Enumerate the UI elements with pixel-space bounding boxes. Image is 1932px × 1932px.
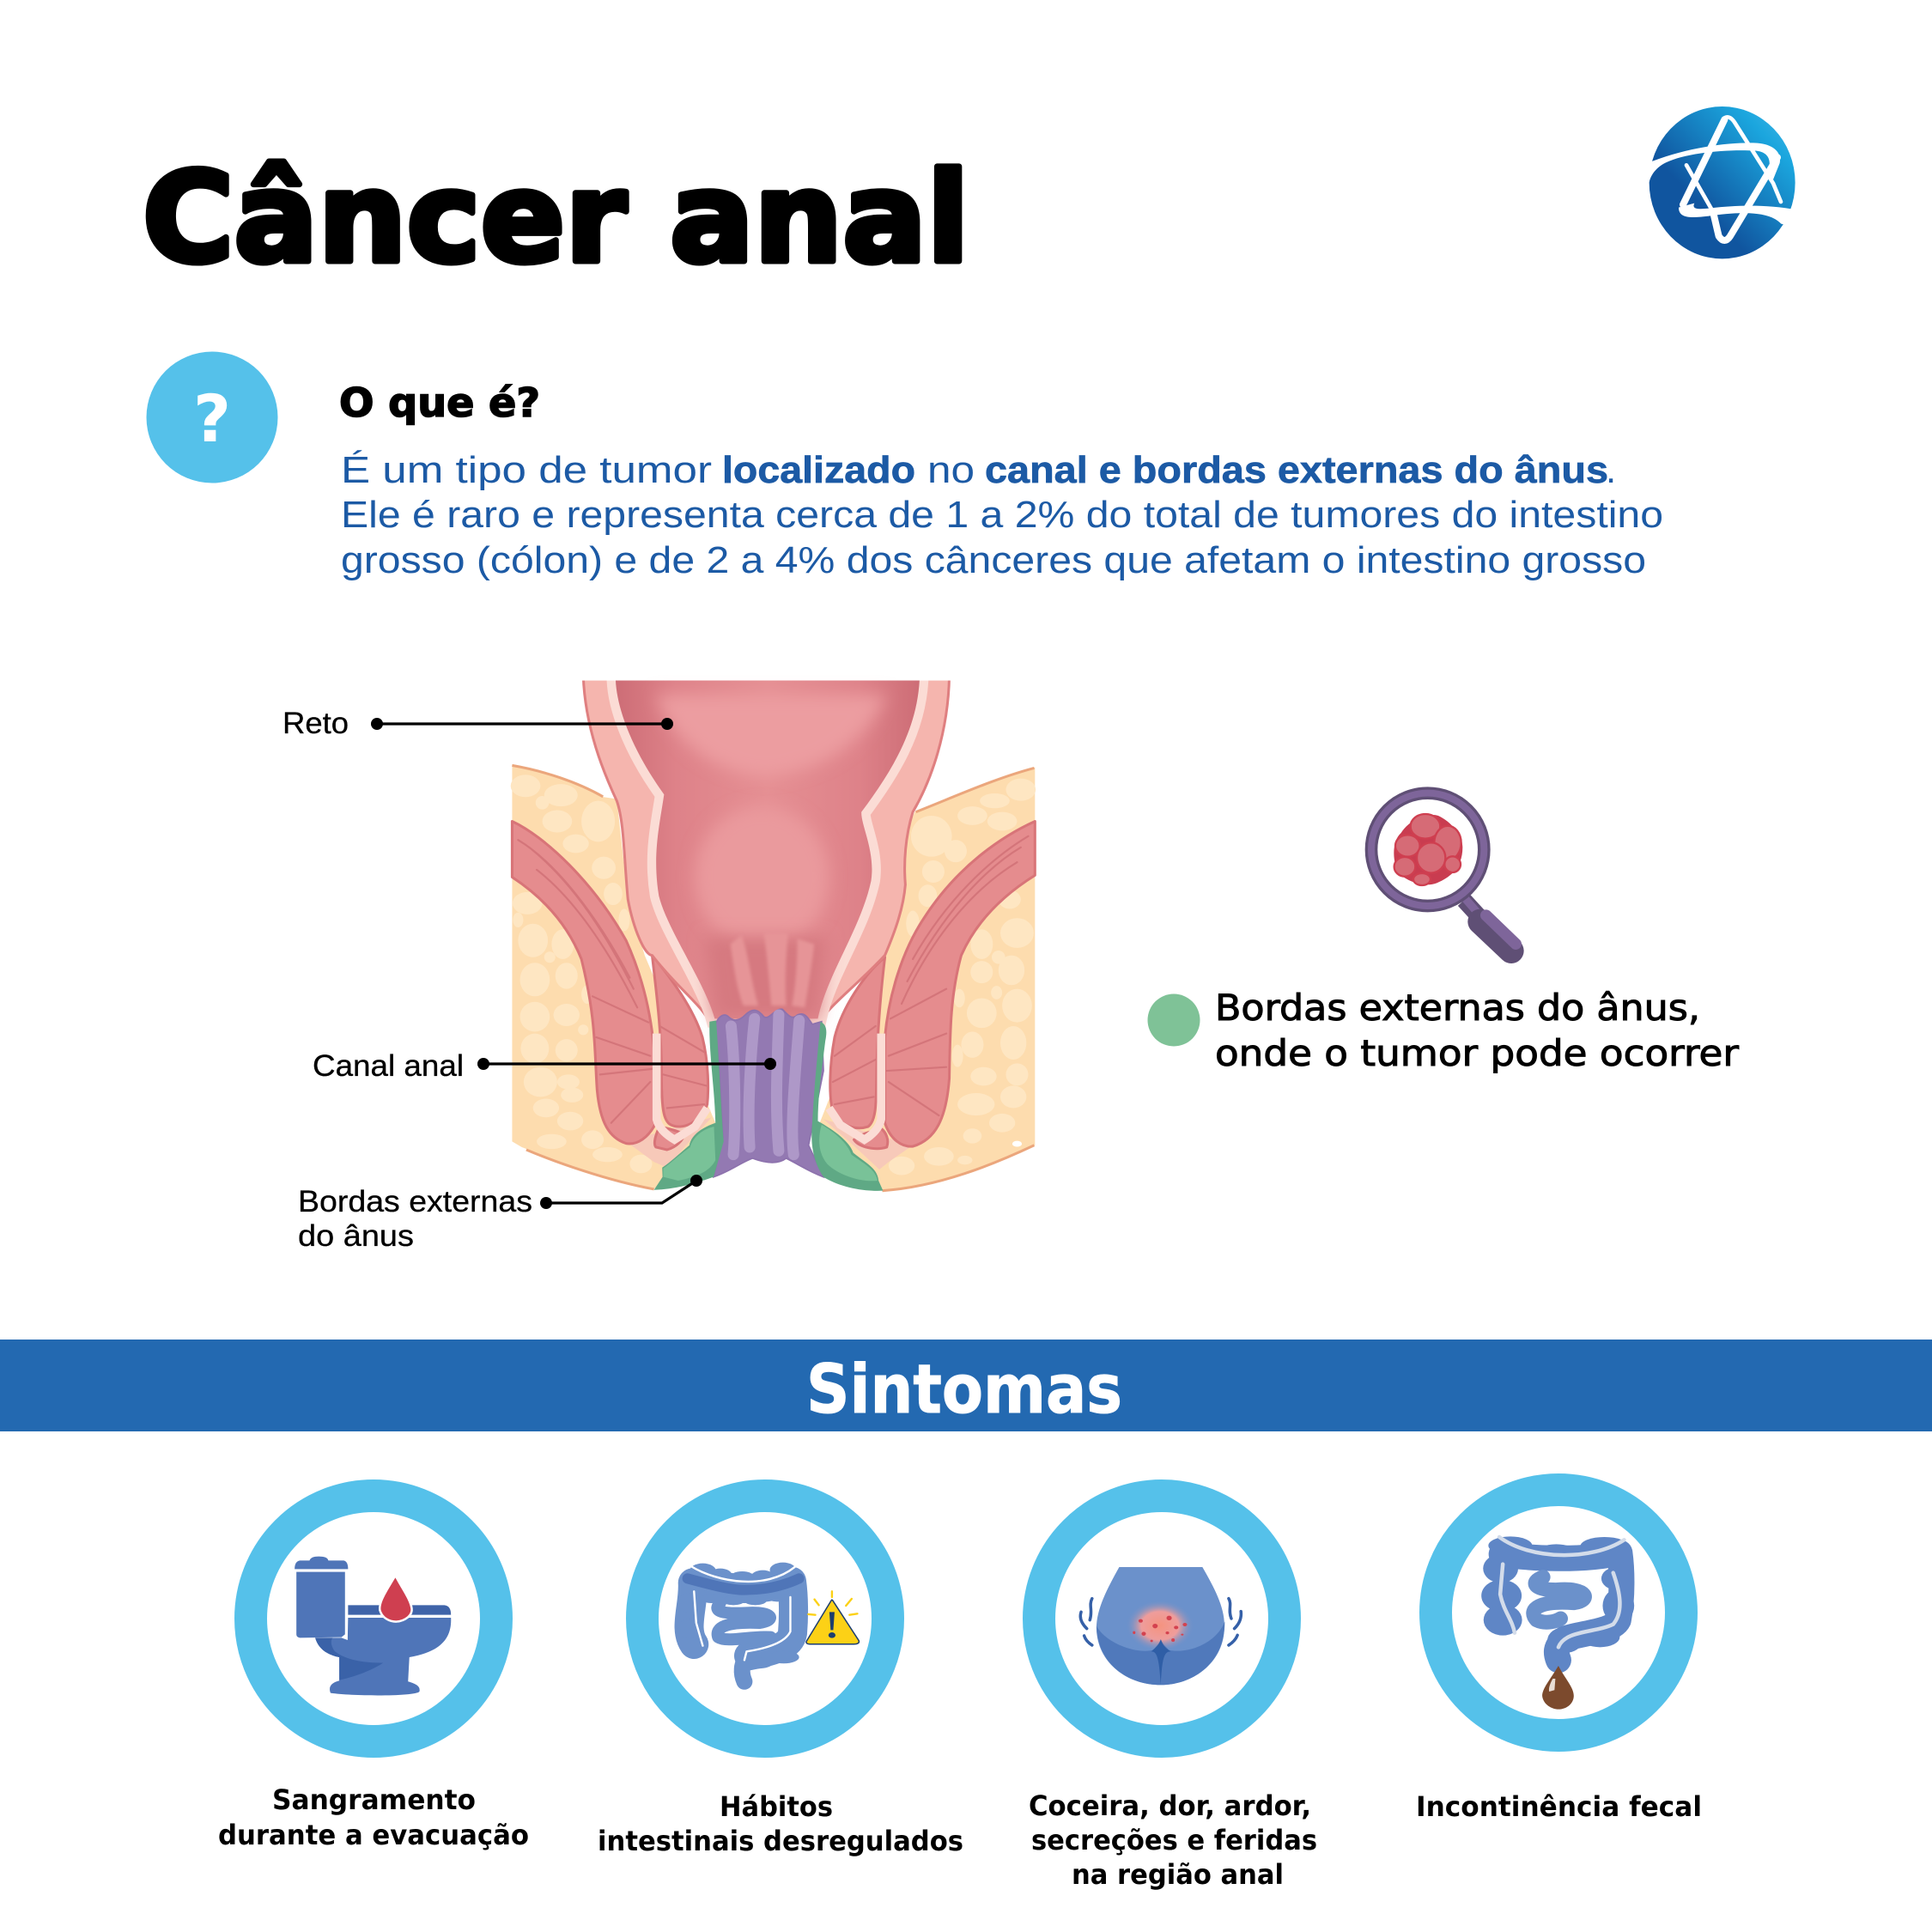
leader: Bordas externas do ânus: do ânus xyxy=(298,1219,414,1253)
leader: Reto xyxy=(283,707,673,740)
lumen highlights and folds xyxy=(656,695,887,1018)
leader: Canal anal xyxy=(313,1049,776,1083)
text block: definition: . xyxy=(1606,449,1616,491)
pale pink tissue under muscles xyxy=(626,1117,913,1170)
fat tissue left xyxy=(511,765,715,1189)
label: sangramento: Sangramento xyxy=(272,1783,476,1816)
icon: intestine with drop xyxy=(1481,1536,1634,1710)
legend: green dot xyxy=(1147,994,1200,1046)
label: coceira: na região anal xyxy=(1072,1858,1284,1891)
leader: Canal anal: Canal anal xyxy=(313,1049,464,1083)
external anal margin: green xyxy=(654,1020,883,1191)
text block: definition: É um tipo de tumor xyxy=(341,449,712,491)
ring xyxy=(1039,1496,1285,1741)
label: coceira: secreções e feridas xyxy=(1031,1824,1317,1856)
label: sangramento xyxy=(218,1783,529,1851)
text block: definition: grosso (cólon) e de 2 a 4% dos cânceres que afetam o intestino grosso xyxy=(341,539,1646,581)
legend text: Bordas externas do ânus, xyxy=(1215,987,1700,1029)
banner: Sintomas xyxy=(0,1340,1932,1431)
panel: incontinência xyxy=(1436,1490,1681,1735)
label: hábitos xyxy=(598,1790,963,1857)
text block: definition: Ele é raro e representa cerca de 1 a 2% do total de tumores do intestino xyxy=(341,494,1663,536)
anatomy illustration xyxy=(511,658,1036,1191)
banner: Sintomas: Sintomas xyxy=(806,1352,1122,1429)
panel: hábitos xyxy=(642,1496,888,1741)
white fascia strips xyxy=(657,1034,881,1139)
label: hábitos: intestinais desregulados xyxy=(598,1825,963,1857)
icon: intestine with warning xyxy=(677,1563,859,1681)
ring xyxy=(251,1496,496,1741)
rectum outer wall xyxy=(583,676,950,1022)
leader: Reto: Reto xyxy=(283,707,349,740)
anal canal xyxy=(714,1009,823,1177)
panel: sangramento xyxy=(251,1496,496,1741)
label: hábitos: Hábitos xyxy=(720,1790,833,1823)
title: Câncer anal xyxy=(143,146,969,291)
label: coceira: Coceira, dor, ardor, xyxy=(1029,1789,1311,1822)
levator and sphincter muscles xyxy=(512,821,1035,1150)
text block: definition xyxy=(341,449,1663,581)
label: sangramento: durante a evacuação xyxy=(218,1819,529,1851)
leader: Bordas externas do ânus: Bordas externas xyxy=(298,1185,532,1218)
icon: toilet with blood drop xyxy=(295,1557,451,1695)
icon: magnifier with tumor xyxy=(1371,793,1516,951)
leader: Bordas externas do ânus xyxy=(298,1175,702,1253)
rectum mucosa edge xyxy=(616,672,920,1018)
icon: irritated buttocks xyxy=(1080,1567,1241,1685)
muscle fibres xyxy=(518,836,1028,1123)
legend text xyxy=(1215,987,1740,1074)
logo: star globe xyxy=(1643,106,1803,258)
ring xyxy=(1436,1490,1681,1735)
text block: definition: no xyxy=(927,449,975,491)
fat tissue right xyxy=(820,768,1036,1191)
panel: coceira xyxy=(1039,1496,1285,1741)
heading: O que é?: O que é? xyxy=(339,380,540,426)
label: incontinência: Incontinência fecal xyxy=(1416,1790,1702,1823)
rectum lumen xyxy=(616,681,920,1018)
text block: definition: localizado xyxy=(722,449,915,491)
ring xyxy=(642,1496,888,1741)
label: coceira xyxy=(1029,1789,1317,1891)
icon: question mark circle: ? xyxy=(193,380,231,457)
icon: question mark circle xyxy=(146,352,278,483)
legend text: onde o tumor pode ocorrer xyxy=(1215,1032,1740,1074)
text block: definition: canal e bordas externas do ânus xyxy=(985,449,1608,491)
